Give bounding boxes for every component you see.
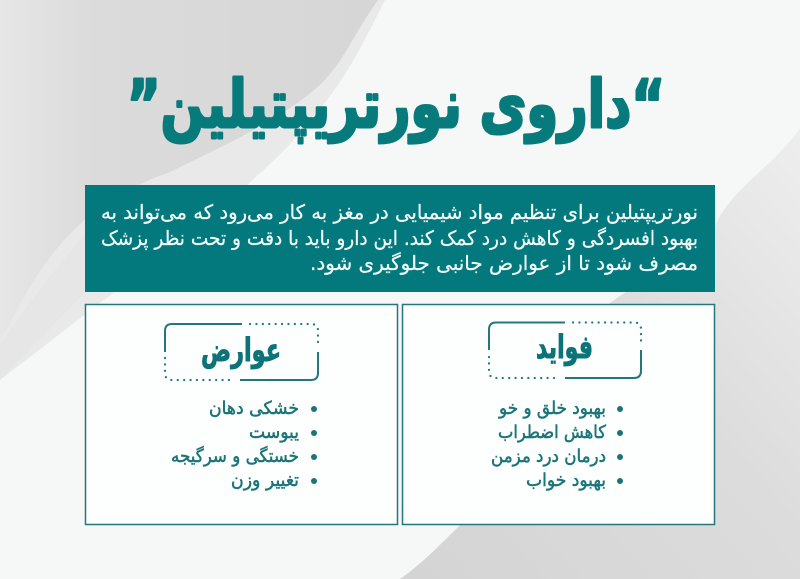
intro text: مصرف شود تا از عوارض جانبی جلوگیری شود. <box>310 251 698 275</box>
intro text: نورتریپتیلین برای تنظیم مواد شیمیایی در مغز به کار می‌رود که می‌تواند به <box>101 200 698 225</box>
benefits heading frame <box>489 322 641 378</box>
side effects bullets <box>311 406 317 484</box>
intro text <box>101 200 698 275</box>
panel: side effects <box>86 304 398 524</box>
side effects list: خستگی و سرگیجه <box>171 445 299 467</box>
benefits box <box>402 304 714 524</box>
background shape: top left dark layer <box>0 0 378 340</box>
side effects heading: عوارض <box>201 331 281 369</box>
benefits list <box>491 398 606 491</box>
panel: benefits <box>402 304 714 524</box>
side effects heading frame <box>165 324 318 380</box>
benefits list: بهبود خواب <box>526 470 606 491</box>
benefits list: بهبود خلق و خو <box>498 398 606 419</box>
side effects list: خشکی دهان <box>209 398 299 419</box>
intro panel <box>85 185 715 292</box>
background shape: bottom left corner <box>0 200 115 380</box>
benefits bullets <box>617 406 623 484</box>
intro text: بهبود افسردگی و کاهش درد کمک کند. این دارو باید با دقت و تحت نظر پزشک <box>101 226 698 251</box>
intro panel background <box>85 185 715 292</box>
side effects box <box>86 304 398 524</box>
background shape: top left light layer <box>0 0 385 380</box>
benefits heading: فواید <box>536 328 593 366</box>
benefits list: کاهش اضطراب <box>498 422 606 443</box>
side effects list: تغییر وزن <box>231 470 299 491</box>
benefits list: درمان درد مزمن <box>491 446 606 467</box>
side effects list: یبوست <box>249 422 299 443</box>
side effects list <box>171 398 299 491</box>
background shape: right and bottom <box>400 128 800 579</box>
